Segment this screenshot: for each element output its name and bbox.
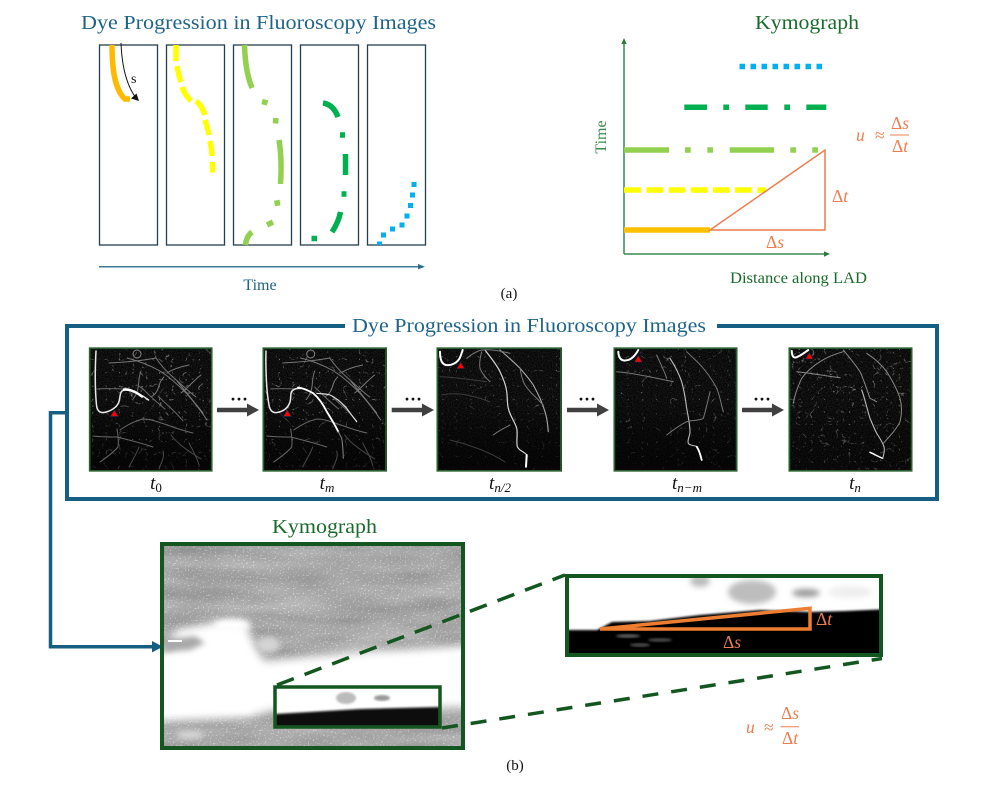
panel 2: yellow dashed vessel [176, 45, 212, 172]
green dash-dot line [684, 105, 826, 110]
time label tn-m: t [672, 473, 677, 494]
arrow with dots 2: ··· [404, 389, 422, 409]
x axis label: Distance along LAD [730, 270, 867, 287]
fluoroscopy image tn-m [614, 348, 737, 472]
time label t0: 0 [155, 480, 162, 495]
panel b heading: Dye Progression in Fluoroscopy Images [352, 315, 706, 337]
section b velocity formula: Δs [781, 703, 799, 723]
zoomed kymograph inset [560, 575, 890, 660]
velocity triangle [710, 150, 825, 230]
time label tn/2: n/2 [494, 480, 511, 495]
time label t0: t [150, 473, 155, 494]
arrow with dots 2 [392, 389, 434, 416]
orange triangle on inset [600, 608, 810, 629]
fluoroscopy image t0 [89, 348, 212, 472]
section b velocity formula: ≈ [764, 717, 774, 737]
arrow with dots 3 [567, 389, 609, 416]
time label tn: t [849, 473, 854, 494]
arrow with dots 1 [217, 389, 259, 416]
time label tm: t [320, 473, 325, 494]
section a: fluoroscopy schematic panels [100, 43, 426, 245]
time label tm: m [325, 480, 334, 495]
velocity formula: Δt [892, 136, 909, 156]
panel 5: blue dotted vessel [377, 182, 416, 245]
panel 1: orange dye segment and s arrow: s [131, 72, 136, 87]
time label: Time [243, 277, 277, 294]
kymograph lines [624, 66, 826, 230]
fluoroscopy image tm [263, 348, 387, 472]
caption b: (b) [506, 758, 524, 774]
panel 1: orange dye segment and s arrow [112, 43, 139, 101]
arrow with dots 3: ··· [578, 389, 596, 409]
connector arrow to kymograph [50, 413, 163, 652]
arrow with dots 4: ··· [753, 389, 771, 409]
panel b: image sequence frame [67, 326, 937, 499]
delta t label: Δt [832, 186, 849, 206]
panel 4: green dash-dot vessel [312, 103, 346, 238]
arrow with dots 4 [742, 389, 784, 416]
orange solid line [624, 227, 710, 233]
velocity formula [856, 113, 909, 156]
inset delta s: Δs [723, 632, 741, 652]
time arrow [99, 264, 425, 269]
kymograph axes [621, 38, 830, 257]
section a: title dye progression: Dye Progression in Fluoroscopy Images [81, 12, 436, 34]
inset region on kymograph [275, 687, 440, 727]
velocity formula: ≈ [875, 125, 885, 145]
zoom guide dashed lines [277, 575, 882, 728]
blue dotted line [740, 64, 823, 69]
section b velocity formula: Δt [782, 728, 799, 748]
time label tn: n [854, 480, 861, 495]
inset delta t: Δt [816, 609, 833, 629]
arrow with dots 1: ··· [230, 389, 248, 409]
section b velocity formula [746, 703, 799, 748]
y axis label: Time [593, 120, 610, 154]
light green dash-dot line [624, 147, 818, 153]
fluoroscopy image tn/2 [437, 348, 562, 472]
section a: kymograph title: Kymograph [755, 12, 859, 34]
fluoroscopy image tn [789, 348, 912, 472]
velocity formula: u [856, 125, 865, 145]
section b: kymograph title: Kymograph [272, 516, 377, 538]
yellow dashed line [624, 187, 766, 193]
velocity formula: Δs [891, 113, 909, 133]
kymograph image [140, 544, 485, 748]
panel frames [100, 45, 426, 245]
panel 3: light green dash-dot vessel [244, 45, 281, 245]
time label tn-m: n−m [677, 480, 702, 495]
section b velocity formula: u [746, 717, 755, 737]
delta s label: Δs [766, 232, 784, 252]
time label tn/2: t [489, 473, 494, 494]
caption a: (a) [501, 286, 517, 302]
